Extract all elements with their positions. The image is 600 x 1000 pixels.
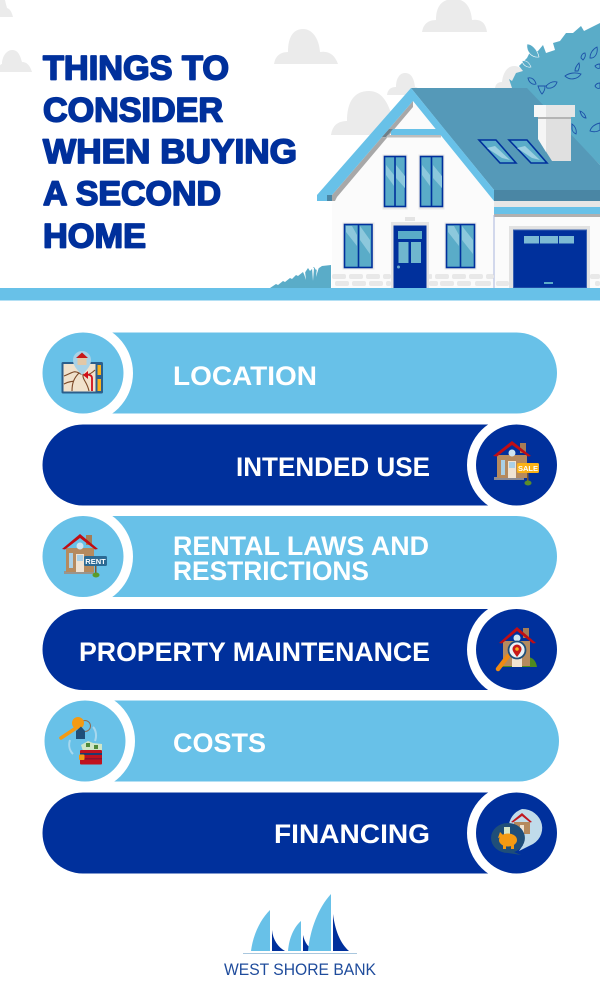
- row: property maintenance: [42, 600, 566, 699]
- window glints: [346, 165, 473, 254]
- row: costs: [0, 691, 559, 791]
- chimney: [534, 105, 575, 161]
- gable shadow and band: [332, 101, 413, 201]
- label: rental laws and restrictions: RESTRICTIONS: [173, 556, 369, 586]
- house: [317, 88, 600, 288]
- wordmark: WEST SHORE BANK: [224, 961, 376, 979]
- title: [43, 50, 297, 256]
- clouds: [0, 0, 526, 135]
- ground strip: [0, 288, 600, 300]
- row: intended use: [42, 416, 566, 514]
- label: financing: FINANCING: [274, 819, 430, 849]
- logo: West Shore Bank: [224, 894, 376, 979]
- lower windows: [344, 224, 474, 268]
- title: WHEN BUYING: [43, 133, 297, 171]
- label: rental laws and restrictions: RENTAL LAWS AND: [173, 531, 429, 561]
- label: costs: COSTS: [173, 728, 266, 758]
- icon: house under magnifier: [498, 627, 537, 669]
- icon: sails: [243, 894, 357, 954]
- icon: house for rent: [62, 534, 107, 578]
- upper windows: [384, 156, 442, 206]
- bricks: [332, 274, 600, 286]
- icon: savings speech bubbles: [491, 809, 542, 855]
- icon: map with pin: [62, 351, 103, 394]
- label: intended use: INTENDED USE: [236, 452, 430, 482]
- main roof: [411, 88, 600, 190]
- label: property maintenance: PROPERTY MAINTENANCE: [79, 637, 430, 667]
- garage wall: [494, 201, 600, 288]
- icon: house for sale: SALE: [518, 464, 538, 473]
- row: financing: [42, 784, 566, 882]
- label: rental laws and restrictions: [173, 531, 429, 586]
- label: location: LOCATION: [173, 361, 317, 391]
- door: [391, 217, 429, 288]
- title: THINGS TO: [43, 50, 229, 88]
- eaves: [317, 88, 494, 201]
- window surrounds: [342, 154, 476, 270]
- garage door: [509, 226, 590, 288]
- title: CONSIDER: [43, 92, 223, 130]
- bush: [270, 265, 331, 288]
- front wall: [332, 101, 494, 288]
- title: HOME: [43, 218, 146, 256]
- icon: house for sale: [493, 441, 539, 486]
- row: rental laws: [0, 506, 557, 606]
- skylights: [479, 140, 547, 163]
- icon: house for rent: RENT: [85, 557, 106, 566]
- title: A SECOND: [43, 175, 221, 213]
- tree: [509, 23, 600, 165]
- icon: key and wallet: [61, 717, 102, 764]
- row: location: [0, 323, 557, 423]
